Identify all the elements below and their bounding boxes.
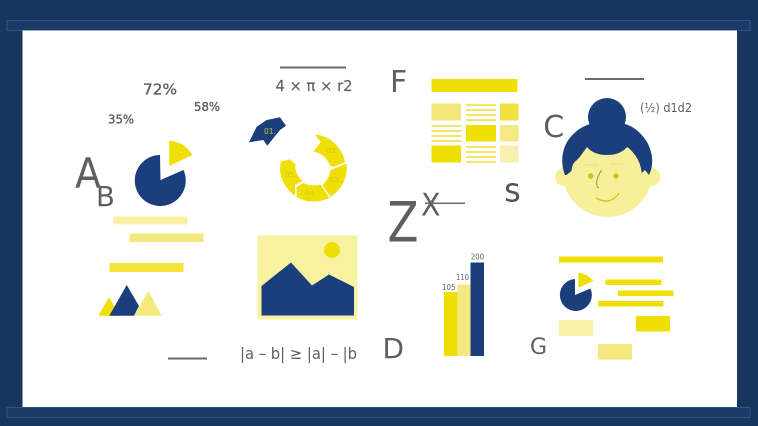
formula: triangle inequality: |a – b| ≥ |a| – |b [240,344,357,363]
percent labels: 72% [143,80,177,98]
short line [168,358,207,360]
letter F: F [390,65,407,100]
small pie chart [560,273,593,311]
donut segment 01: 01. [264,127,276,136]
table graphic [432,79,518,163]
letter C: C [543,110,564,145]
picture icon [258,236,358,320]
letter D: D [382,332,404,365]
letters A and B [75,149,115,213]
formula line: rhombus area: (½) d1d2 [640,100,692,115]
donut segments 02 to 05: 05. [285,171,296,179]
face illustration [555,98,660,217]
percent labels [108,80,220,126]
letters A and B: B [96,181,115,213]
text bars [110,216,204,272]
letter Z with superscript x: Z [388,191,418,255]
report text bars [598,280,674,306]
letter Z with superscript x [388,188,465,255]
formula line: sphere area [276,66,352,95]
bar chart: 110 [456,273,469,282]
report boxes [559,316,670,360]
formula line: rhombus area [585,78,692,115]
percent labels: 58% [194,100,220,114]
letter G: G [530,335,547,360]
donut segments 02 to 05: 02. [327,147,338,155]
report title bar [559,256,663,262]
formula line: sphere area: 4 × π × r2 [276,77,352,95]
bar chart [442,252,484,356]
bar chart: 200 [471,252,484,262]
donut segments 02 to 05: 04. [305,189,316,197]
donut segments 02 to 05: 03. [330,176,341,184]
percent labels: 35% [108,112,134,126]
bar chart: 105 [442,283,456,292]
donut segments 02 to 05 [280,134,347,202]
segmented donut chart [249,117,347,202]
mountains icon [98,285,162,316]
letter Z with superscript x: X [421,188,440,224]
letter S: S [504,178,520,208]
pie chart [135,141,192,206]
letters A and B: A [75,149,101,198]
